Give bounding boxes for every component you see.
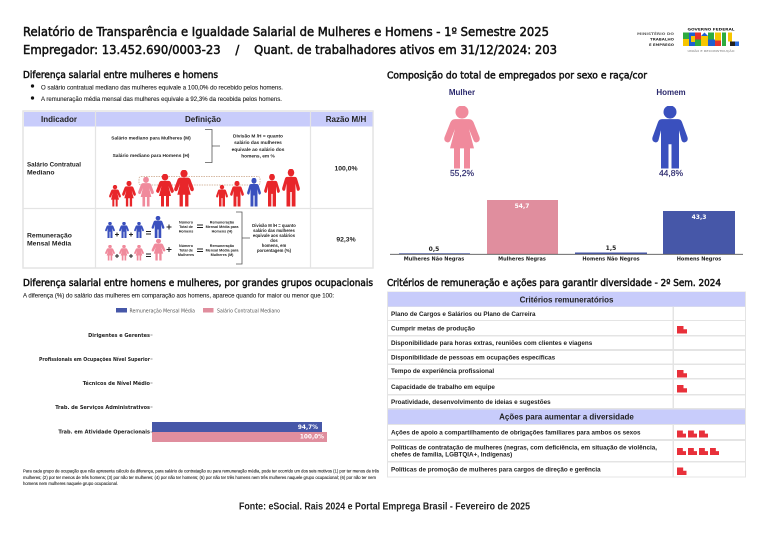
bar chart: sexo e raça/cor bbox=[390, 200, 743, 262]
textos: ações: Políticas de contratação de mulheres (negras, com deficiência, em situação de violência, bbox=[391, 444, 657, 452]
heading: critérios: Critérios de remuneração e ações para garantir diversidade - 2º Sem. 2024 bbox=[387, 278, 721, 289]
textos: critérios: Cumprir metas de produção bbox=[391, 326, 475, 332]
panel: tabela de indicadores: 92,3% bbox=[336, 236, 356, 244]
definição: remuneração média homens: Homens bbox=[179, 230, 193, 234]
panel: tabela de indicadores: Mediano bbox=[27, 170, 55, 176]
definição: remuneração média homens: Remuneração bbox=[210, 220, 235, 224]
panel: tabela de indicadores: Indicador bbox=[41, 115, 77, 124]
bar chart: grupos ocupacionais: Trab. de Serviços Administrativos bbox=[55, 405, 150, 411]
icon: homem: 44,8% bbox=[659, 168, 683, 178]
definição: remuneração média mulheres: Mulheres (M) bbox=[211, 253, 234, 257]
logo: governo federal: UNIÃO E RECONSTRUÇÃO bbox=[688, 48, 735, 53]
chave e texto: divisão M/H: homens, em bbox=[262, 243, 286, 248]
chave e texto: divisão M/H: dos bbox=[270, 238, 278, 243]
text: nota de rodapé: mulheres; (2) por ter menos de três homens; (3) por não ter mulheres; (4) por não ter homens; (5) por não ter três homens nem três mulheres naquele grupo ocupacional; (6) por não ter nem bbox=[23, 475, 376, 480]
title: Empregador: 13.452.690/0003-23 / Quant. de trabalhadores ativos em 31/12/2024: 203 bbox=[23, 43, 557, 57]
logo: ministério bbox=[637, 31, 674, 47]
icon: mulher: 55,2% bbox=[450, 168, 474, 178]
panel: critérios e ações bbox=[387, 292, 746, 478]
definição: remuneração média mulheres: Total de bbox=[179, 248, 193, 252]
panel: tabela de indicadores: Mensal Média bbox=[27, 240, 71, 248]
bullets: resumo: O salário contratual mediano das mulheres equivale a 100,0% do recebido pelos homens. bbox=[41, 84, 283, 92]
pictograma: mediana bbox=[109, 169, 300, 206]
textos: critérios: Proatividade, desenvolvimento de ideias e sugestões bbox=[391, 399, 551, 406]
textos: ações: chefes de família, LGBTQIA+, Indígenas) bbox=[391, 452, 512, 458]
definição: remuneração média homens: Total de bbox=[179, 225, 193, 229]
definição: remuneração média mulheres bbox=[105, 239, 239, 260]
icon: homem bbox=[652, 88, 688, 178]
bar chart: sexo e raça/cor: Mulheres Negras bbox=[498, 256, 546, 262]
logo: governo federal: GOVERNO FEDERAL bbox=[688, 28, 736, 32]
definição: salário mediano: Salário mediano para Mulheres (M) bbox=[111, 136, 191, 142]
definição: salário mediano bbox=[111, 130, 285, 162]
legend: Salário Contratual Mediano bbox=[217, 307, 280, 314]
bar chart: grupos ocupacionais bbox=[39, 333, 327, 442]
definição: salário mediano: salário das mulheres bbox=[234, 140, 282, 146]
bar chart: sexo e raça/cor: 0,5 bbox=[429, 246, 439, 253]
heading: grupos ocupacionais: Diferença salarial entre homens e mulheres, por grandes grupos ocupacionais bbox=[23, 278, 373, 289]
textos: critérios bbox=[391, 311, 593, 406]
cabeçalho: critérios remuneratórios bbox=[388, 292, 745, 306]
textos: ações bbox=[391, 430, 657, 474]
title: Relatório de Transparência e Igualdade Salarial de Mulheres e Homens - 1º Semestre 2025 bbox=[23, 25, 549, 39]
text: nota de rodapé: Para cada grupo de ocupação que não apresenta cálculo da diferença, para salário de contratação ou para remuneração média, pode ter ocorrido um dos seis motivos (1) por ter menos de três bbox=[23, 468, 380, 474]
chave e texto: divisão M/H: salário das mulheres bbox=[253, 228, 295, 233]
bar chart: grupos ocupacionais: Técnicos de Nível Médio bbox=[83, 380, 151, 387]
bullets: resumo bbox=[31, 84, 283, 103]
logo: ministério: E EMPREGO bbox=[649, 43, 674, 47]
bar chart: grupos ocupacionais: 100,0% bbox=[300, 434, 324, 440]
chave e texto: divisão M/H bbox=[236, 212, 296, 264]
text: nota de rodapé: homens nem mulheres naquele grupo ocupacional. bbox=[23, 481, 118, 486]
textos: critérios: Tempo de experiência profissional bbox=[391, 368, 494, 375]
textos: critérios: Disponibilidade de pessoas em ocupações específicas bbox=[391, 354, 556, 362]
bar chart: grupos ocupacionais: Dirigentes e Gerentes bbox=[88, 333, 150, 339]
panel: tabela de indicadores: 100,0% bbox=[334, 166, 358, 172]
panel: tabela de indicadores: Definição bbox=[185, 115, 221, 124]
chave e texto: divisão M/H: equivale aos salários bbox=[253, 233, 296, 238]
definição: remuneração média homens: Homens (H) bbox=[212, 230, 233, 234]
chave e texto: divisão M/H: porcentagem (%) bbox=[257, 248, 292, 253]
heading: diferença salarial: Diferença salarial entre mulheres e homens bbox=[23, 70, 218, 81]
textos: critérios: Plano de Cargos e Salários ou Plano de Carreira bbox=[391, 311, 536, 318]
legend: Remuneração Mensal Média bbox=[130, 307, 195, 314]
definição: remuneração média mulheres: Mensal Média para bbox=[206, 248, 239, 252]
panel: tabela de indicadores: Remuneração bbox=[27, 232, 72, 240]
definição: salário mediano: Divisão M /H = quanto bbox=[233, 134, 283, 140]
definição: remuneração média homens bbox=[105, 216, 239, 238]
legend bbox=[116, 307, 280, 314]
logo: ministério: MINISTÉRIO DO bbox=[637, 31, 674, 36]
panel: tabela de indicadores bbox=[23, 111, 373, 268]
icon: mulher: Mulher bbox=[449, 88, 475, 97]
icons: marcadores bbox=[677, 326, 719, 475]
definição: remuneração média homens: Mensal Média para bbox=[206, 225, 239, 229]
linhas: critérios bbox=[388, 307, 745, 408]
icon: homem: Homem bbox=[656, 88, 686, 97]
definição: remuneração média mulheres: Remuneração bbox=[210, 244, 235, 248]
definição: salário mediano: homens, em % bbox=[241, 154, 276, 160]
textos: ações: Ações de apoio a compartilhamento de obrigações familiares para ambos os sexos bbox=[391, 430, 641, 436]
panel: tabela de indicadores: Salário Contratual bbox=[27, 162, 81, 168]
textos: critérios: Capacidade de trabalho em equipe bbox=[391, 384, 495, 391]
bullets: resumo: A remuneração média mensal das mulheres equivale a 92,3% da recebida pelos homens. bbox=[41, 96, 282, 103]
definição: remuneração média mulheres: Número bbox=[179, 244, 194, 248]
definição: remuneração média mulheres: Mulheres bbox=[178, 253, 194, 257]
title bbox=[23, 25, 557, 57]
cabeçalho: ações: Ações para aumentar a diversidade bbox=[499, 412, 634, 422]
bar chart: sexo e raça/cor: Homens Negros bbox=[677, 256, 721, 262]
cabeçalho: critérios remuneratórios: Critérios remuneratórios bbox=[520, 296, 614, 304]
definição: remuneração média homens: Número bbox=[179, 220, 194, 224]
logo: ministério: TRABALHO bbox=[650, 38, 674, 42]
textos: critérios: Disponibilidade para horas extras, reuniões com clientes e viagens bbox=[391, 340, 593, 347]
text: nota de diferença: A diferença (%) do salário das mulheres em comparação aos homens, aparece quando for maior ou menor que 100: bbox=[23, 292, 334, 300]
chave e texto: divisão M/H: Divisão M /H = quanto bbox=[252, 223, 296, 228]
textos: ações: Políticas de promoção de mulheres para cargos de direção e gerência bbox=[391, 466, 601, 474]
text: nota de rodapé bbox=[23, 468, 380, 486]
bar chart: sexo e raça/cor: Mulheres Não Negras bbox=[404, 256, 464, 262]
bar chart: sexo e raça/cor: 54,7 bbox=[515, 203, 529, 210]
linhas: ações bbox=[388, 425, 745, 476]
definição: salário mediano: Salário mediano para Homens (H) bbox=[113, 153, 190, 159]
bar chart: sexo e raça/cor: Homens Não Negros bbox=[582, 256, 640, 262]
bar chart: sexo e raça/cor: 43,3 bbox=[692, 214, 706, 221]
bar chart: grupos ocupacionais: 94,7% bbox=[298, 425, 318, 431]
bar chart: grupos ocupacionais: Profissionais em Ocupações Nível Superior bbox=[39, 356, 150, 363]
bar chart: grupos ocupacionais: Trab. em Atividade Operacionais bbox=[58, 430, 150, 436]
logo: governo federal bbox=[683, 28, 739, 53]
cabeçalho: ações bbox=[388, 410, 745, 424]
definição: salário mediano: equivale ao salário dos bbox=[232, 147, 285, 153]
panel: tabela de indicadores: Razão M/H bbox=[326, 115, 366, 124]
heading: composição: Composição do total de empregados por sexo e raça/cor bbox=[387, 70, 647, 82]
fonte: Fonte: eSocial. Rais 2024 e Portal Emprega Brasil - Fevereiro de 2025 bbox=[239, 502, 530, 512]
bar chart: sexo e raça/cor: 1,5 bbox=[606, 245, 616, 252]
icon: mulher bbox=[444, 88, 480, 178]
